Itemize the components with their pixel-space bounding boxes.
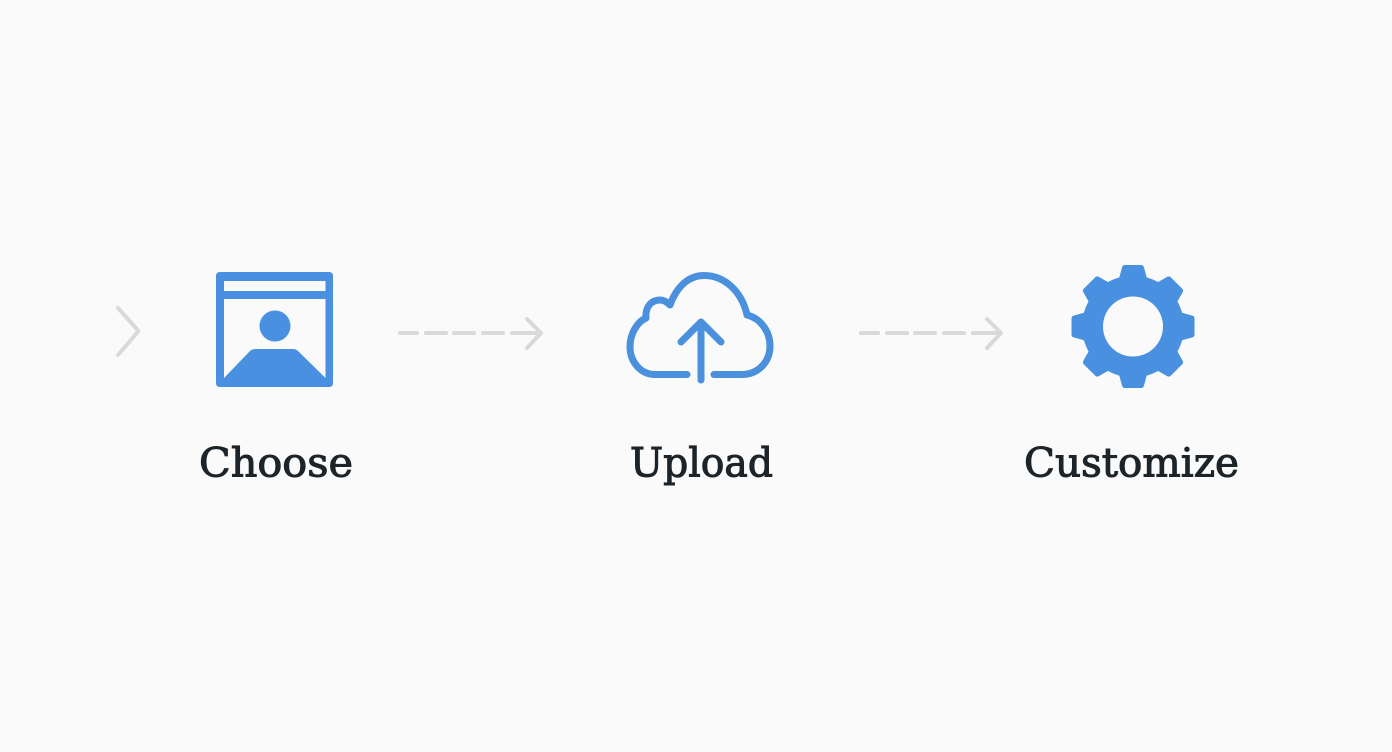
arrow: choose to upload <box>400 319 541 348</box>
icon: gear <box>1072 265 1194 388</box>
icon: entry chevron <box>118 308 138 355</box>
label: Choose: Choose <box>199 440 353 486</box>
icon: cloud upload <box>630 276 770 380</box>
label: Upload: Upload <box>630 440 773 486</box>
step: Customize <box>1024 265 1239 486</box>
label: Customize: Customize <box>1024 440 1239 486</box>
arrow: upload to customize <box>861 319 1001 348</box>
step: Upload <box>630 276 773 486</box>
step: Choose <box>199 272 353 486</box>
icon: image window <box>216 272 333 387</box>
